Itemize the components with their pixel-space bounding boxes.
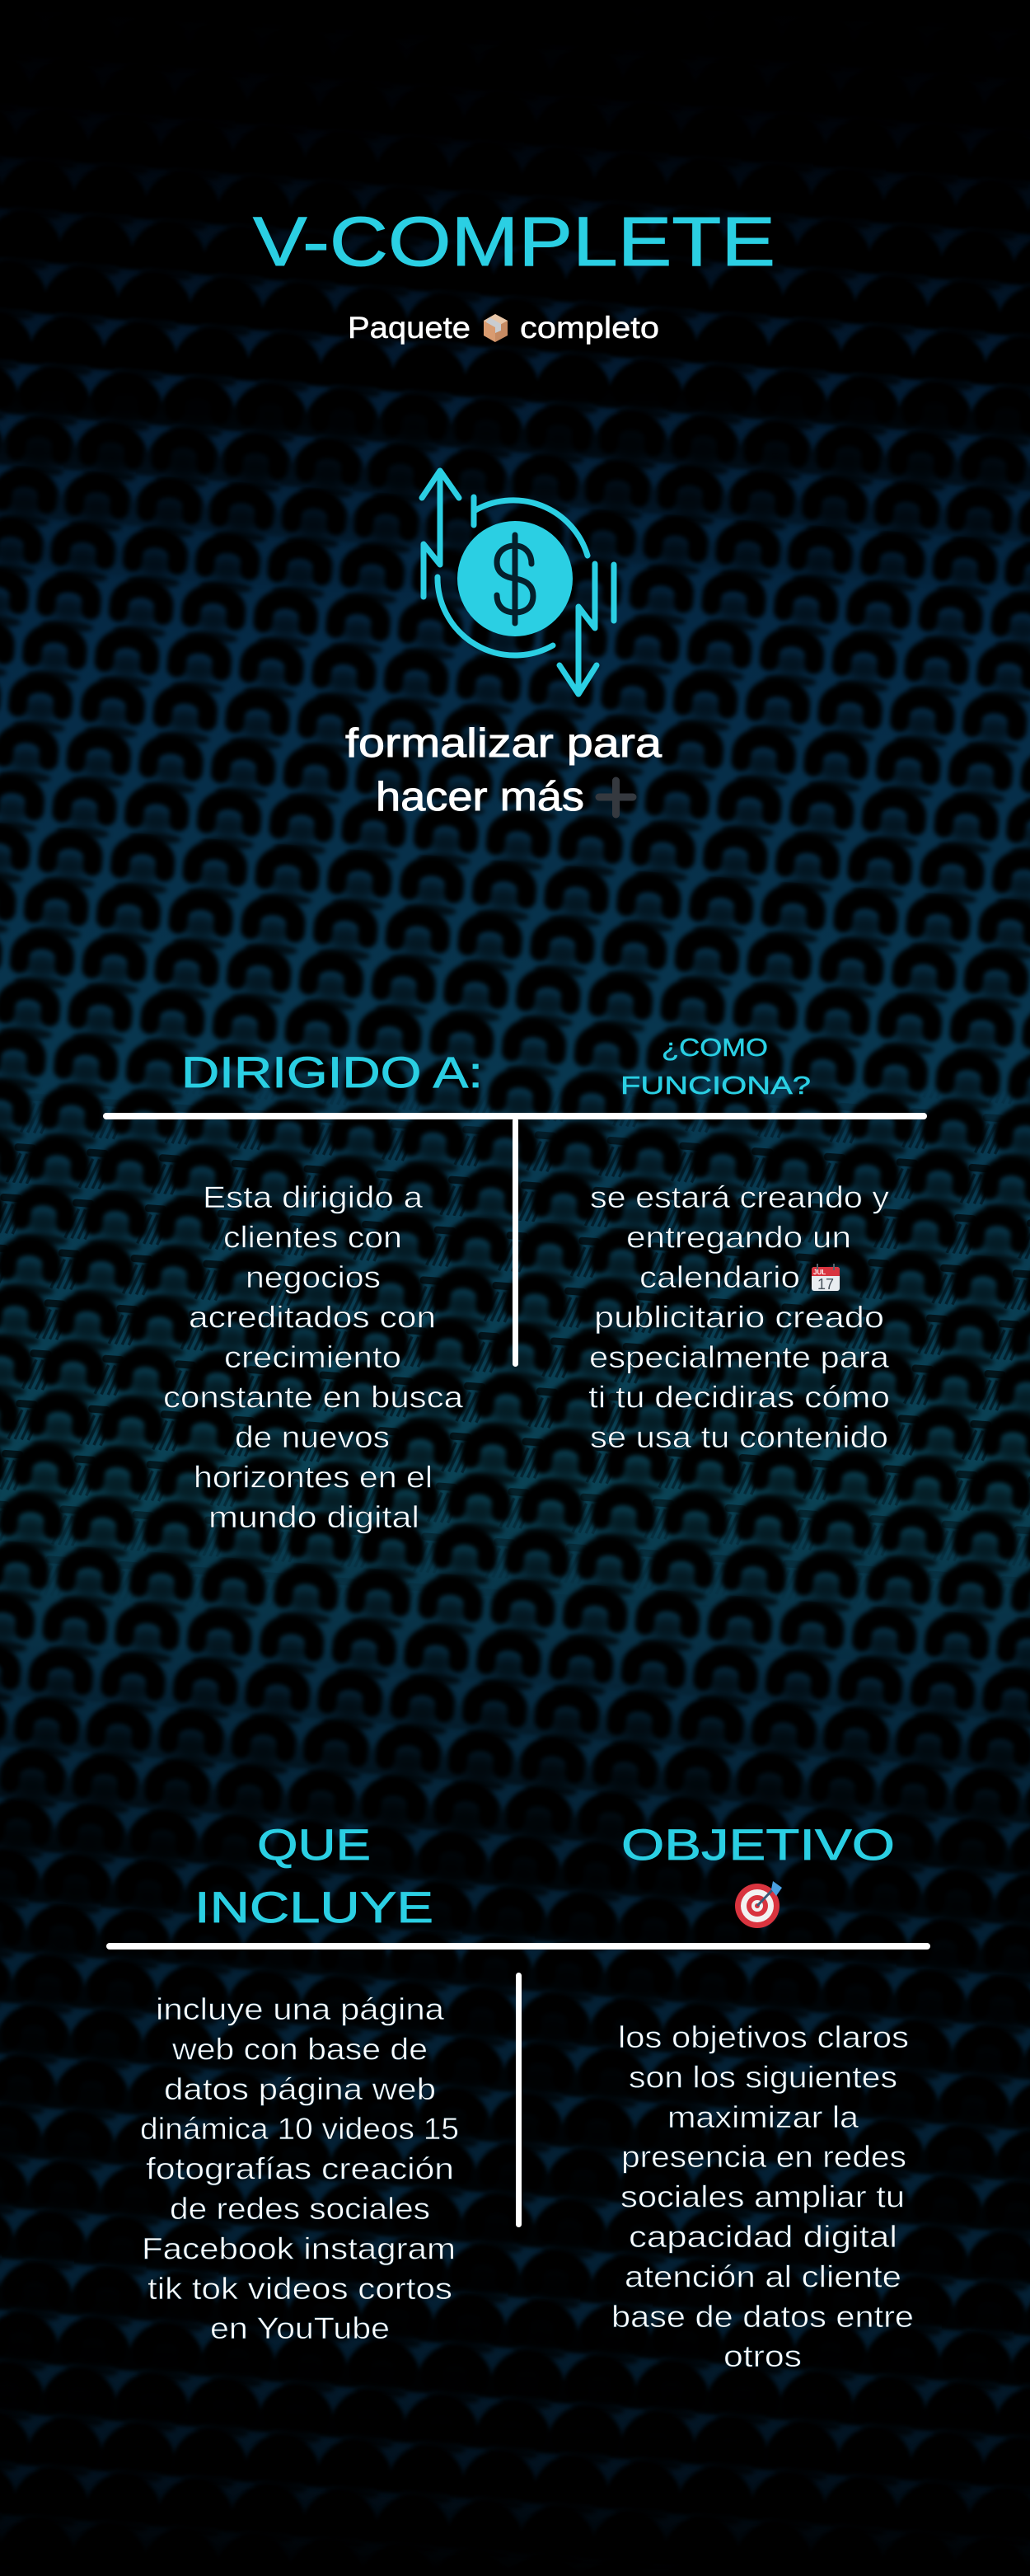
heading: que incluye bbox=[194, 1821, 433, 1932]
text: dirigido a: acreditados con bbox=[189, 1301, 436, 1334]
divider horizontal bbox=[106, 1943, 930, 1950]
dollar sign bbox=[497, 535, 533, 623]
text: dirigido a: constante en busca bbox=[163, 1380, 463, 1415]
text: que incluye: en YouTube bbox=[210, 2311, 390, 2345]
icon: calendar emoji bbox=[812, 1264, 840, 1293]
icon: calendar emoji: 17 bbox=[817, 1276, 834, 1293]
divider vertical bbox=[513, 1118, 518, 1367]
icon: plus bbox=[599, 781, 633, 814]
text: dirigido a: Esta dirigido a bbox=[203, 1180, 423, 1214]
text: como funciona: se estará creando y bbox=[590, 1180, 890, 1214]
subtitle: paquete completo bbox=[348, 311, 659, 345]
text: dirigido a: clientes con bbox=[223, 1220, 402, 1255]
text: dirigido a bbox=[163, 1180, 463, 1534]
panel: dirigido a / como funciona bbox=[103, 1033, 927, 1534]
heading: que incluye: INCLUYE bbox=[194, 1884, 433, 1932]
text: dirigido a: crecimiento bbox=[224, 1340, 401, 1374]
text: objetivo bbox=[611, 2020, 914, 2373]
arc bottom bbox=[438, 577, 553, 655]
text: objetivo: sociales ampliar tu bbox=[620, 2180, 905, 2214]
icon: target emoji bbox=[735, 1881, 782, 1928]
heading: como funciona: FUNCIONA? bbox=[620, 1071, 811, 1100]
icon: dollar coin with arrows bbox=[422, 471, 614, 694]
text: objetivo: atención al cliente bbox=[625, 2259, 901, 2293]
subtitle: paquete completo: Paquete bbox=[348, 311, 471, 345]
coin bbox=[457, 521, 573, 636]
text: que incluye: Facebook instagram bbox=[142, 2231, 456, 2265]
text: dirigido a: horizontes en el bbox=[194, 1461, 433, 1494]
text: que incluye: incluye una página bbox=[156, 1992, 444, 2026]
text: objetivo: maximizar la bbox=[667, 2100, 859, 2134]
text: dirigido a: mundo digital bbox=[208, 1500, 419, 1534]
heading: que incluye: QUE bbox=[257, 1821, 371, 1870]
text: objetivo: capacidad digital bbox=[629, 2220, 897, 2254]
text: como funciona: ti tu decidiras cómo bbox=[588, 1380, 890, 1415]
text: como funciona: especialmente para bbox=[589, 1340, 889, 1374]
text: que incluye: tik tok videos cortos bbox=[147, 2272, 452, 2306]
arrow up bbox=[422, 471, 459, 597]
divider horizontal bbox=[103, 1113, 927, 1119]
text: como funciona: publicitario creado bbox=[594, 1301, 884, 1334]
tagline: formalizar para bbox=[345, 721, 662, 766]
icon: calendar emoji: JUL bbox=[813, 1269, 826, 1276]
arrow down bbox=[559, 564, 614, 694]
text: objetivo: otros bbox=[723, 2339, 802, 2373]
arc top bbox=[474, 497, 588, 556]
text: que incluye: fotografías creación bbox=[146, 2152, 454, 2186]
text: que incluye bbox=[140, 1992, 459, 2345]
text: que incluye: de redes sociales bbox=[170, 2192, 430, 2226]
icon: package emoji bbox=[484, 314, 508, 342]
heading: como funciona bbox=[620, 1033, 811, 1100]
text: que incluye: web con base de bbox=[171, 2032, 428, 2066]
panel: que incluye / objetivo bbox=[106, 1821, 930, 2373]
text: que incluye: dinámica 10 videos 15 bbox=[140, 2112, 459, 2146]
tagline bbox=[345, 721, 662, 819]
title: V-COMPLETE bbox=[253, 203, 775, 280]
text: como funciona: calendario bbox=[639, 1260, 800, 1294]
text: como funciona bbox=[588, 1180, 890, 1454]
text: como funciona: entregando un bbox=[626, 1220, 851, 1255]
text: objetivo: base de datos entre bbox=[611, 2300, 914, 2334]
heading: dirigido a: DIRIGIDO A: bbox=[181, 1049, 483, 1097]
text: objetivo: son los siguientes bbox=[629, 2060, 897, 2094]
text: dirigido a: negocios bbox=[246, 1260, 381, 1294]
text: objetivo: los objetivos claros bbox=[618, 2020, 909, 2054]
text: objetivo: presencia en redes bbox=[621, 2140, 906, 2174]
tagline: hacer más bbox=[376, 775, 584, 819]
heading: como funciona: ¿COMO bbox=[662, 1033, 768, 1062]
heading: objetivo: OBJETIVO bbox=[621, 1821, 895, 1870]
text: como funciona: se usa tu contenido bbox=[590, 1420, 888, 1454]
subtitle: paquete completo: completo bbox=[520, 311, 659, 345]
text: dirigido a: de nuevos bbox=[235, 1420, 390, 1454]
text: que incluye: datos página web bbox=[164, 2072, 436, 2106]
divider vertical bbox=[516, 1973, 522, 2227]
